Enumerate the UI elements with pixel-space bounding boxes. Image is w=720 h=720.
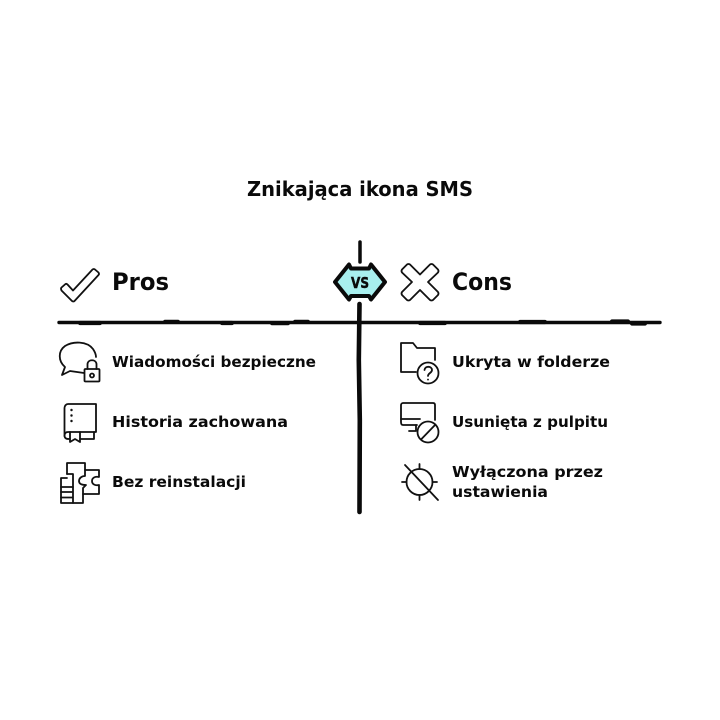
item: Ukryta w folderze: Ukryta w folderze: [452, 353, 610, 371]
vertical divider: [359, 242, 360, 512]
title: Znikająca ikona SMS: [247, 177, 473, 201]
icon: monitor with prohibited sign: [401, 403, 438, 442]
vs badge: [335, 264, 385, 300]
icon: crossed out settings gear: [402, 464, 438, 500]
item: Historia zachowana: Historia zachowana: [112, 413, 288, 431]
icon: check mark: [61, 269, 99, 302]
icon: chat bubble with padlock: [60, 343, 100, 382]
icon: cross mark: [402, 264, 438, 300]
cons heading: Cons: [452, 268, 512, 296]
item: Wyłączona przez ustawienia: Wyłączona przez: [452, 463, 603, 481]
horizontal divider: [59, 322, 660, 324]
item: Bez reinstalacji: Bez reinstalacji: [112, 473, 246, 491]
item: Wyłączona przez ustawienia: [452, 463, 603, 501]
item: Usunięta z pulpitu: Usunięta z pulpitu: [452, 413, 608, 431]
item: Wiadomości bezpieczne: Wiadomości bezpieczne: [112, 353, 316, 371]
pros heading: Pros: [112, 268, 169, 296]
icon: book with bookmark: [64, 404, 96, 442]
vs badge: VS: [351, 274, 369, 292]
icon: puzzle with app pieces: [61, 463, 99, 503]
icon: folder with question mark: [401, 343, 438, 384]
item: Wyłączona przez ustawienia: ustawienia: [452, 483, 548, 501]
